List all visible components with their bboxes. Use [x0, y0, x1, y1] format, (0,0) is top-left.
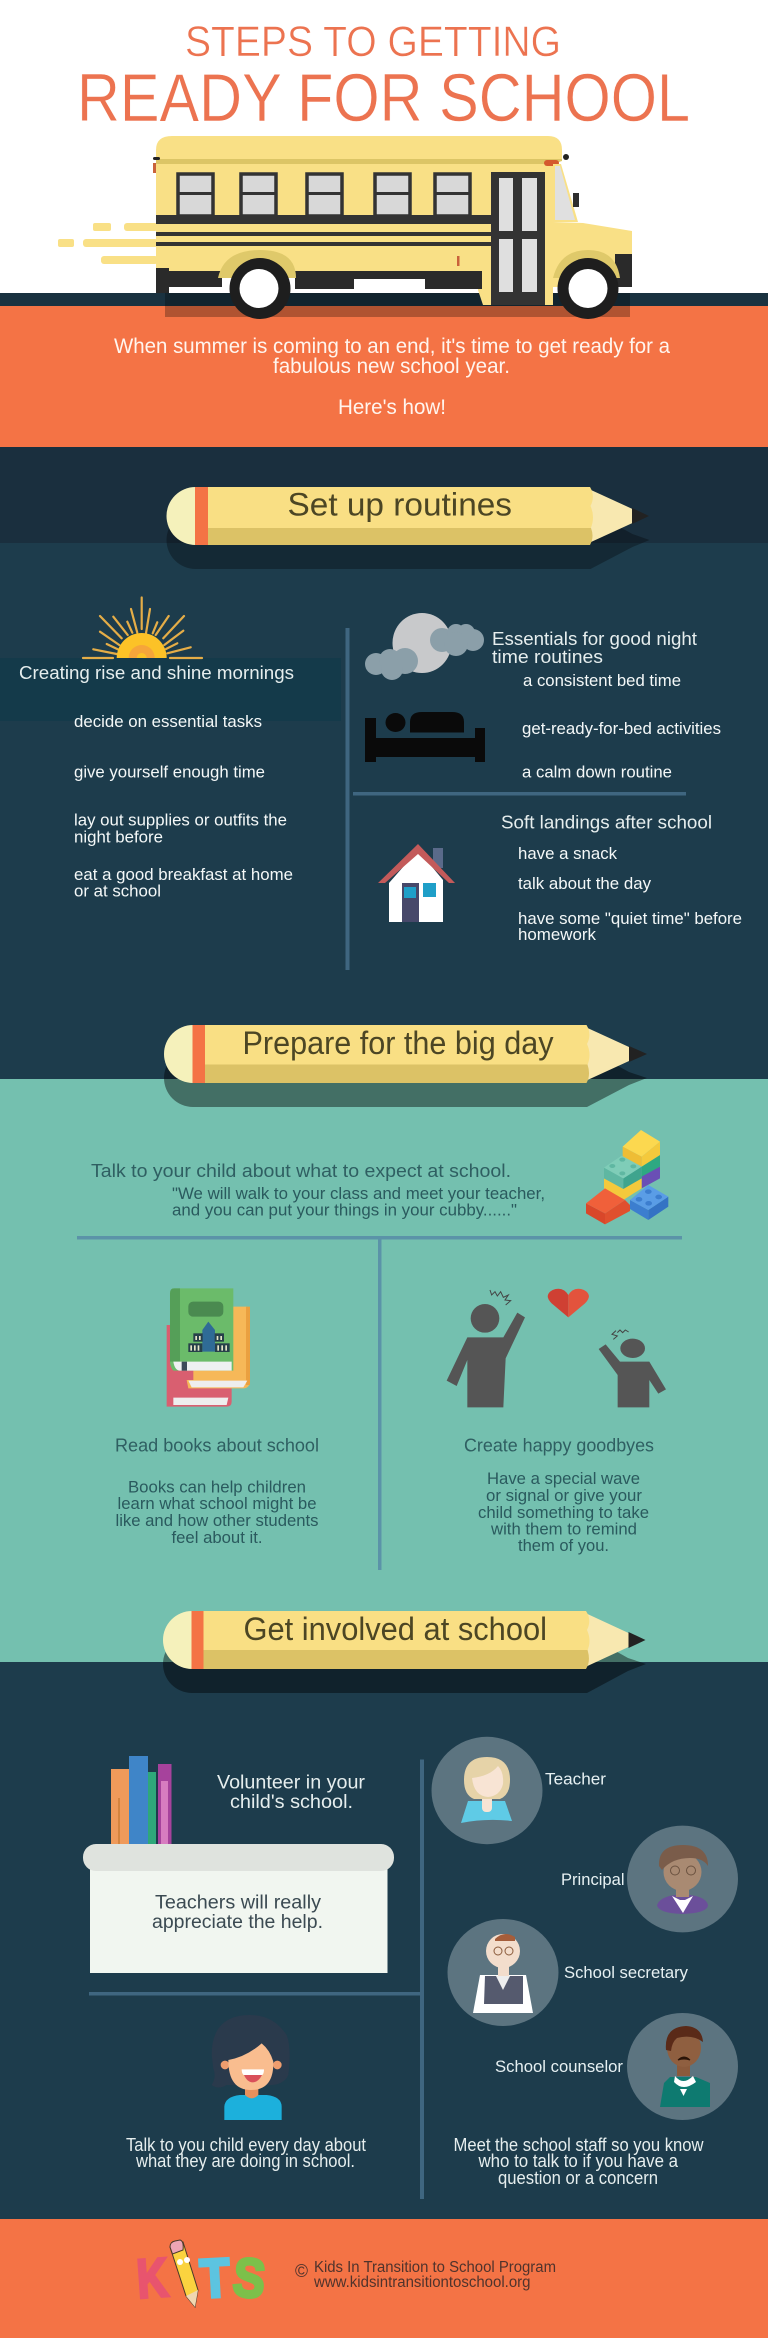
panel: get involved at school [0, 1611, 768, 2219]
icon: school counselor [627, 2013, 738, 2120]
pencil heading: prepare for the big day [164, 1025, 647, 1107]
column: night time routines: get-ready-for-bed activities [522, 719, 721, 738]
credit text [295, 2259, 556, 2291]
pencil heading: get involved at school [163, 1611, 646, 1693]
icon: books on desk [83, 1756, 394, 1973]
title: STEPS TO GETTING [185, 18, 561, 66]
icon: teacher [432, 1737, 542, 1844]
column: read books about school [115, 1288, 319, 1547]
footer [0, 2219, 768, 2338]
column: night time routines [365, 613, 721, 782]
column: school staff: question or a concern [498, 2168, 658, 2188]
column: create happy goodbyes [447, 1289, 666, 1555]
column: soft landings: have some "quiet time" before [518, 909, 742, 928]
logo: KITS: K [135, 2246, 170, 2310]
title: READY FOR SCHOOL [77, 60, 690, 136]
column: read books about school: Read books about school [115, 1434, 319, 1456]
pencil heading: set up routines: Set up routines [288, 486, 512, 522]
column: volunteer: child's school. [230, 1792, 353, 1813]
column: school staff [432, 1737, 738, 2188]
column: rise and shine mornings: Creating rise and shine mornings [19, 663, 294, 683]
panel: set up routines [0, 447, 768, 1079]
column: create happy goodbyes: child something to take [478, 1504, 649, 1522]
column: night time routines: a calm down routine [522, 762, 672, 782]
column: create happy goodbyes: Create happy goodbyes [464, 1434, 654, 1456]
intro text: Here's how! [338, 396, 446, 419]
text: talk to your child: and you can put your things in your cubby......" [172, 1202, 517, 1220]
column: talk to your child: what they are doing in school. [135, 2151, 355, 2171]
icon: moon and clouds [365, 613, 484, 680]
column: create happy goodbyes: Have a special wave [487, 1470, 640, 1488]
pencil heading: set up routines [166, 486, 650, 569]
column: create happy goodbyes: with them to remind [490, 1520, 637, 1538]
text: talk to your child: "We will walk to your class and meet your teacher, [172, 1185, 545, 1203]
column: rise and shine mornings: night before [74, 828, 163, 846]
column: create happy goodbyes: or signal or give your [486, 1487, 642, 1505]
label: teacher: Teacher [545, 1770, 606, 1788]
column: volunteer: appreciate the help. [152, 1912, 323, 1933]
column: school staff: Meet the school staff so you know [454, 2135, 704, 2155]
column: volunteer: Volunteer in your [217, 1772, 366, 1794]
intro panel [0, 306, 768, 447]
column: rise and shine mornings: eat a good breakfast at home [74, 865, 293, 884]
intro text [114, 335, 670, 419]
column: volunteer [83, 1756, 394, 1973]
icon: lego blocks [586, 1130, 668, 1224]
column: night time routines: Essentials for good night [492, 629, 697, 649]
column: read books about school: feel about it. [172, 1529, 262, 1547]
icon: school secretary [448, 1919, 558, 2026]
column: rise and shine mornings: decide on essential tasks [74, 712, 262, 731]
credit text: Kids In Transition to School Program [314, 2259, 556, 2276]
icon: bed [365, 712, 485, 762]
column: talk to your child [126, 2015, 366, 2171]
icon: pencil mascot [170, 2240, 198, 2307]
label: school secretary: School secretary [564, 1963, 688, 1982]
icon: stack of books [167, 1288, 250, 1407]
icon: house [378, 844, 455, 922]
label: principal: Principal [561, 1870, 624, 1889]
title [77, 18, 690, 136]
column: volunteer: Teachers will really [155, 1892, 322, 1914]
icon: sunrise [83, 598, 202, 658]
label: school counselor: School counselor [495, 2057, 623, 2076]
text: talk to your child [91, 1160, 545, 1220]
text: talk to your child: Talk to your child about what to expect at school. [91, 1160, 511, 1181]
pencil heading: get involved at school: Get involved at school [244, 1611, 547, 1647]
column: talk to your child: Talk to you child every day about [126, 2135, 366, 2155]
icon: principal [627, 1826, 738, 1932]
bus windows [178, 174, 470, 216]
icon: smiling child [212, 2015, 290, 2120]
column: read books about school: like and how other students [116, 1512, 318, 1530]
logo: KITS: S [230, 2245, 268, 2310]
credit text: © [295, 2261, 308, 2281]
column: rise and shine mornings: give yourself enough time [74, 762, 265, 782]
pencil heading: prepare for the big day: Prepare for the big day [242, 1025, 554, 1061]
icon: school bus [58, 136, 632, 319]
panel: prepare for the big day [0, 1025, 768, 1662]
intro text: When summer is coming to an end, it's time to get ready for a [114, 335, 670, 358]
column: soft landings: talk about the day [518, 874, 651, 893]
logo: KITS: T [198, 2246, 231, 2310]
column: rise and shine mornings: lay out supplies or outfits the [74, 810, 287, 830]
column: create happy goodbyes: them of you. [518, 1537, 609, 1555]
icon: waving parent and child [447, 1289, 666, 1407]
column: rise and shine mornings: or at school [74, 882, 161, 900]
column: night time routines: time routines [492, 647, 603, 667]
column: rise and shine mornings [0, 598, 341, 900]
logo: KITS [135, 2240, 268, 2310]
credit text: www.kidsintransitiontoschool.org [313, 2274, 530, 2291]
column: school staff: who to talk to if you have a [478, 2151, 679, 2171]
column: soft landings [378, 812, 742, 944]
intro text: fabulous new school year. [273, 355, 510, 378]
column: read books about school: Books can help children [128, 1478, 306, 1496]
column: soft landings: Soft landings after school [501, 812, 712, 832]
column: read books about school: learn what school might be [118, 1495, 316, 1513]
column: night time routines: a consistent bed time [523, 671, 681, 690]
column: soft landings: homework [518, 925, 596, 944]
column: soft landings: have a snack [518, 844, 617, 863]
